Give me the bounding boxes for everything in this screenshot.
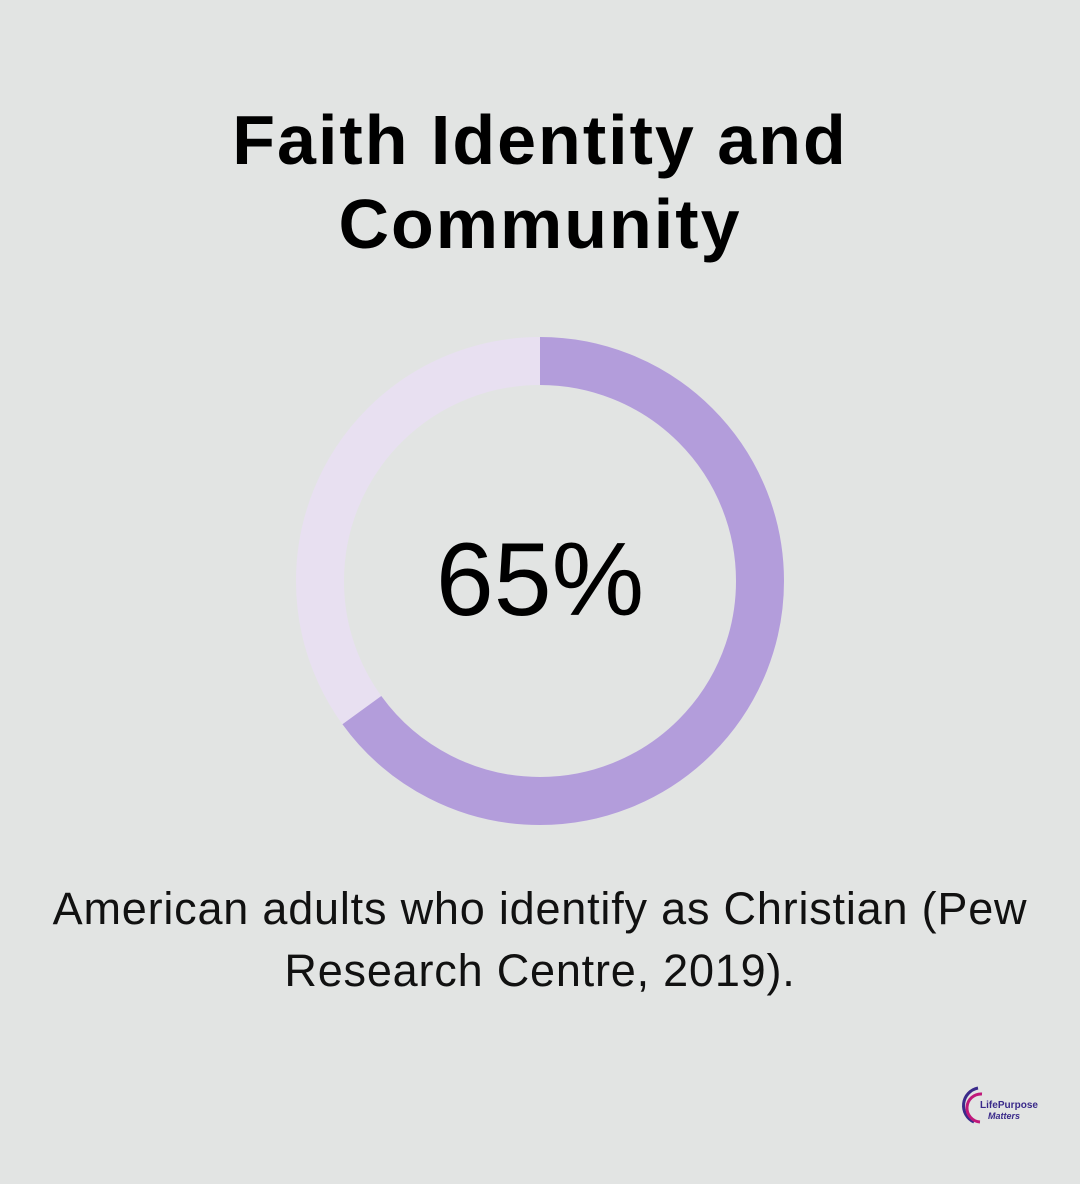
caption <box>52 883 1027 996</box>
caption: American adults who identify as Christian (Pew <box>53 883 1027 934</box>
logo: Matters <box>988 1111 1020 1121</box>
logo: LifePurpose <box>980 1100 1038 1111</box>
title: Community <box>338 185 742 263</box>
arc: 65% <box>320 361 760 801</box>
logo <box>962 1086 1038 1124</box>
title: Faith Identity and <box>232 101 848 179</box>
title <box>232 101 848 263</box>
track <box>320 361 760 801</box>
caption: Research Centre, 2019). <box>284 945 796 996</box>
value: 65% <box>436 522 644 638</box>
